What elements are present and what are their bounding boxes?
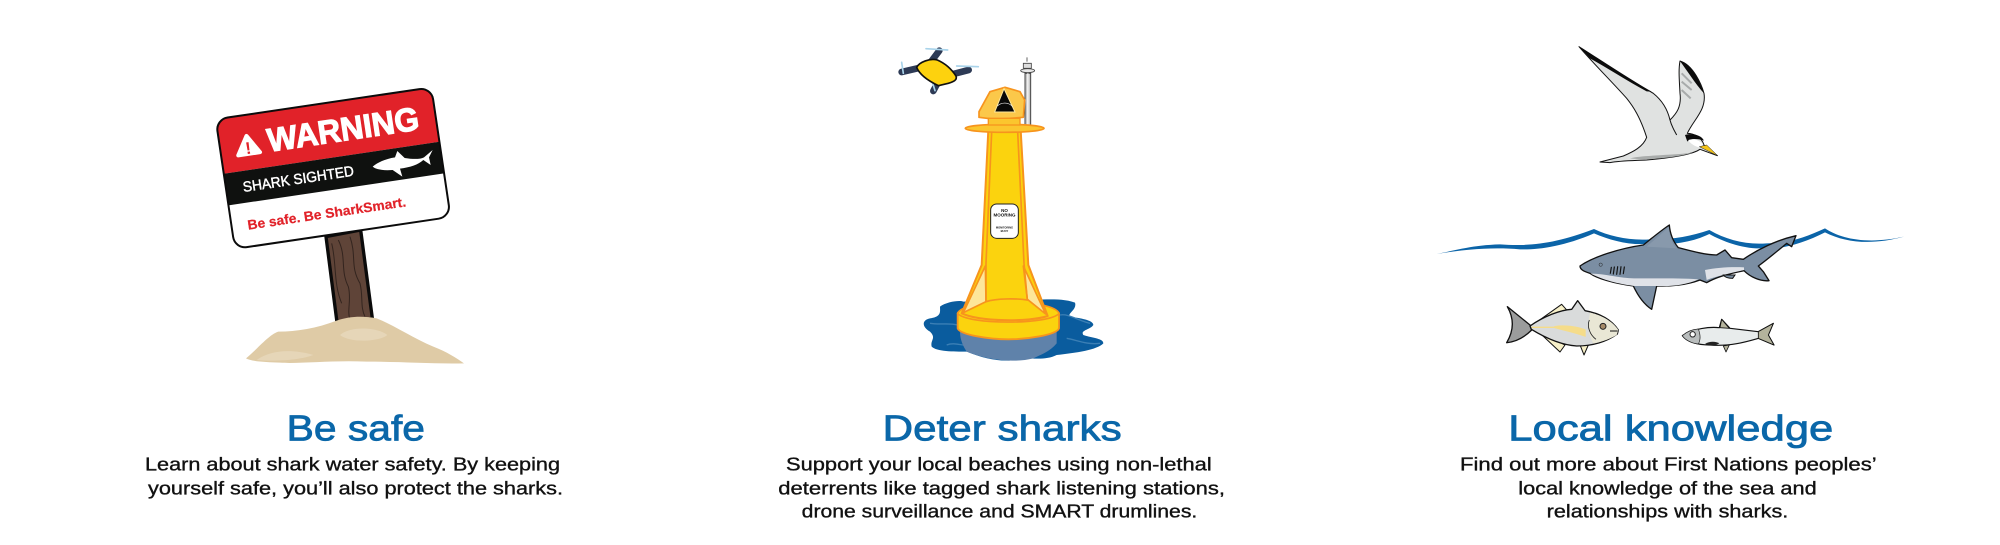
water pool [924,299,1103,361]
heading: deter sharks: Deter sharks [883,408,1122,449]
no mooring plate: NO [1001,208,1008,213]
sign subheading: SHARK SIGHTED [242,164,355,196]
sand mound [246,317,464,363]
icon: buoy in water [924,57,1103,361]
panel: deter sharks [778,49,1225,521]
icon: warning sign on sand mound [216,87,464,363]
body text: local knowledge: Find out more about First Nations peoples’ [1460,454,1877,475]
body text: be safe [145,454,563,498]
heading: be safe: Be safe [287,408,425,449]
drone propellers [902,49,978,91]
body text: deter sharks [778,454,1225,521]
body text: be safe: yourself safe, you’ll also protect the sharks. [148,477,563,498]
icon: sea scene [1437,47,1904,355]
no mooring plate [991,204,1018,238]
body text: deter sharks: Support your local beaches using non-lethal [786,454,1212,475]
housing dark opening [995,89,1015,112]
no mooring plate: BUOY [1001,229,1009,233]
sign post [326,230,372,325]
tern in flight [1579,47,1718,163]
shark [1580,225,1796,309]
drone body [917,59,956,86]
heading: local knowledge: Local knowledge [1508,408,1833,449]
icon: white shark on sign [373,150,433,177]
panel: local knowledge [1437,47,1904,521]
warning triangle [236,134,260,155]
sensor mast [1021,57,1035,125]
sign slogan: Be safe. Be SharkSmart. [246,194,407,233]
buoy top housing [979,87,1025,119]
sardine fish [1682,319,1774,352]
sign heading: WARNING [265,100,421,159]
no mooring plate: MONITORING [996,225,1013,229]
body text: local knowledge: relationships with sharks. [1547,500,1788,521]
body text: local knowledge: local knowledge of the sea and [1518,477,1817,498]
buoy base [958,307,1059,339]
body text: deter sharks: drone surveillance and SMART drumlines. [802,500,1197,521]
buoy reflection [960,332,1057,361]
icon: drone [902,49,978,91]
buoy tower [962,130,1048,320]
tower edges [986,132,1027,302]
body text: be safe: Learn about shark water safety. By keeping [145,454,560,475]
body text: local knowledge [1460,454,1877,521]
buoy flange [965,124,1044,132]
body text: deter sharks: deterrents like tagged shark listening stations, [778,477,1225,498]
tower side panels [963,266,1046,314]
warning exclamation: ! [244,139,253,158]
buoy base top [958,302,1059,322]
water line [1437,228,1904,254]
warning sign board [216,87,451,249]
no mooring plate: MOORING [994,213,1016,218]
panel: be safe [145,87,563,498]
drone arms [902,51,969,91]
trevally fish [1507,301,1618,355]
